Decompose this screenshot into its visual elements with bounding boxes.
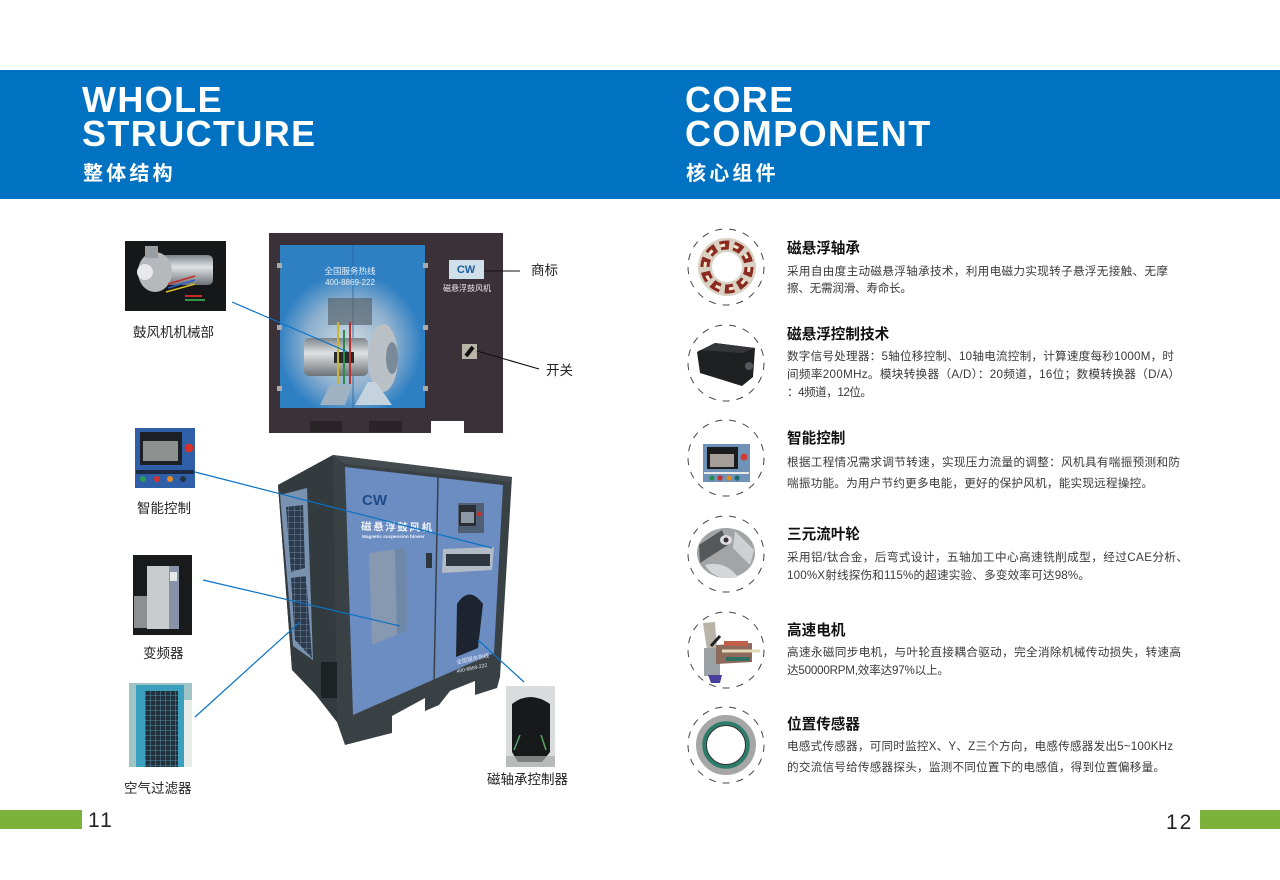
connector: control <box>195 472 492 548</box>
description: 采用自由度主动磁悬浮轴承技术，利用电磁力实现转子悬浮无接触、无摩 <box>787 264 1168 278</box>
door branding: 400-8869-222 <box>456 663 488 675</box>
illustration: magnetic suspension blower <box>278 455 512 745</box>
component: high speed motor <box>688 612 1181 688</box>
text: hotline: 全国服务热线 <box>324 266 376 276</box>
description: 达50000RPM,效率达97%以上。 <box>787 663 949 677</box>
description <box>787 264 1168 295</box>
subtitle: 整体结构: 整体结构 <box>83 162 176 185</box>
text: hotline <box>324 266 376 287</box>
description: ：4频道，12位。 <box>787 385 872 399</box>
icon: control box <box>688 325 764 401</box>
motor in cabinet <box>304 298 398 405</box>
title: WHOLE STRUCTURE: STRUCTURE <box>82 113 317 154</box>
door branding: Magnetic suspension blower <box>362 534 425 539</box>
connector: blower <box>232 302 348 352</box>
title: CORE COMPONENT: COMPONENT <box>685 113 932 154</box>
description: 数字信号处理器：5轴位移控制、10轴电流控制，计算速度每秒1000M，时 <box>787 349 1174 363</box>
photo: inverter <box>133 555 192 635</box>
photo: intelligent control panel <box>135 428 195 488</box>
photo: air filter <box>129 683 192 767</box>
connector: logo <box>484 270 520 272</box>
label: 商标: 商标 <box>531 263 558 278</box>
heading: 位置传感器 <box>787 715 860 733</box>
icon: control panel <box>688 420 764 496</box>
description: 的交流信号给传感器探头，监测不同位置下的电感值，得到位置偏移量。 <box>787 760 1165 774</box>
label: 鼓风机机械部: 鼓风机机械部 <box>133 325 214 340</box>
heading: 三元流叶轮 <box>787 525 860 543</box>
label: 智能控制: 智能控制 <box>137 501 191 516</box>
photo: blower mechanical part <box>125 241 226 311</box>
door branding: CW <box>362 492 388 509</box>
component: position sensor <box>688 707 1173 783</box>
label: 空气过滤器: 空气过滤器 <box>124 781 192 796</box>
label: 变频器: 变频器 <box>143 646 184 661</box>
connector: filter <box>195 622 300 717</box>
component: magnetic control technology <box>688 325 1180 401</box>
description: 根据工程情况需求调节转速，实现压力流量的调整：风机具有喘振预测和防 <box>787 455 1180 469</box>
label: 开关: 开关 <box>546 363 573 378</box>
header band: core component <box>640 70 1280 199</box>
logo plate <box>449 260 484 279</box>
footer: left page number <box>0 809 114 832</box>
heading: 磁悬浮控制技术 <box>787 325 890 343</box>
subtitle: 核心组件: 核心组件 <box>686 161 779 185</box>
connector: bearing controller <box>478 640 524 682</box>
icon: impeller <box>688 516 764 592</box>
description: 电感式传感器，可同时监控X、Y、Z三个方向，电感传感器发出5~100KHz <box>787 739 1173 753</box>
label: 磁轴承控制器: 磁轴承控制器 <box>487 772 568 787</box>
door branding: 磁悬浮鼓风机 <box>361 520 434 534</box>
description <box>787 550 1188 582</box>
heading: 高速电机 <box>787 621 846 639</box>
illustration: cabinet interior view <box>269 233 503 433</box>
connector: inverter <box>203 580 400 626</box>
heading: 磁悬浮轴承 <box>787 239 860 257</box>
switch <box>462 344 477 359</box>
icon: bearing <box>688 229 764 305</box>
component: magnetic bearing <box>688 229 1168 305</box>
logo plate: CW <box>457 264 476 276</box>
component: ternary impeller <box>688 516 1188 592</box>
description <box>787 645 1181 677</box>
description: 高速永磁同步电机，与叶轮直接耦合驱动，完全消除机械传动损失，转速高 <box>787 645 1181 659</box>
photo: magnetic bearing controller <box>506 686 555 767</box>
footer: right page number: 12 <box>1166 811 1193 834</box>
component: intelligent control <box>688 420 1180 496</box>
description <box>787 349 1180 399</box>
title: CORE COMPONENT: CORE <box>685 79 795 120</box>
footer: right page number <box>1166 810 1280 834</box>
footer: left page number: 11 <box>88 809 114 832</box>
door branding: 全国服务热线 <box>456 651 490 666</box>
description <box>787 739 1173 774</box>
text: cabinet nameplate: 磁悬浮鼓风机 <box>443 283 491 293</box>
description: 100%X射线探伤和115%的超速实验、多变效率可达98%。 <box>787 568 1090 582</box>
connector: switch <box>477 351 539 369</box>
description: 采用铝/钛合金，后弯式设计，五轴加工中心高速铣削成型，经过CAE分析、 <box>787 550 1188 564</box>
header band: whole structure <box>0 70 640 199</box>
text: hotline: 400-8869-222 <box>325 278 375 287</box>
description: 喘振功能。为用户节约更多电能，更好的保护风机，能实现远程操控。 <box>787 476 1153 490</box>
icon: sensor ring <box>688 707 764 783</box>
heading: 智能控制 <box>787 429 845 447</box>
icon: motor cutaway <box>688 612 764 688</box>
title: WHOLE STRUCTURE: WHOLE <box>82 79 223 120</box>
description: 间频率200MHz。模块转换器（A/D）：20频道，16位；数模转换器（D/A） <box>787 367 1180 381</box>
description: 擦、无需润滑、寿命长。 <box>787 281 912 295</box>
description <box>787 455 1180 490</box>
door branding <box>361 492 490 675</box>
